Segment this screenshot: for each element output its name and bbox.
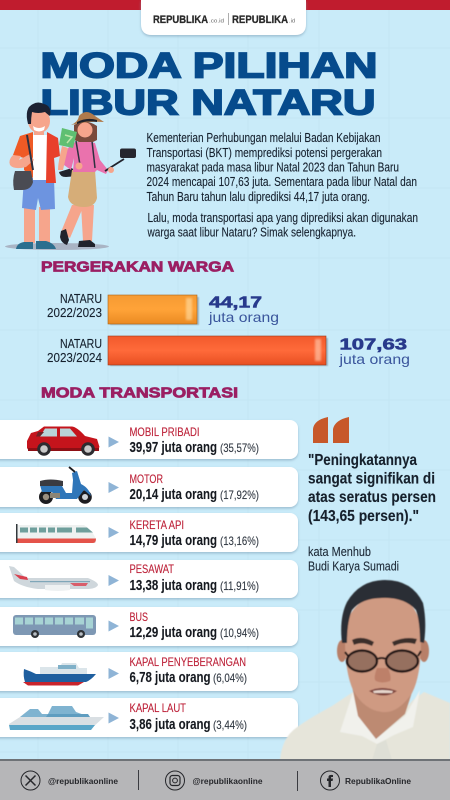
arrow: [108, 527, 119, 538]
value: 6,78 juta orang: [130, 670, 210, 686]
bar: 2023/2024: [108, 336, 328, 366]
arrow: [108, 620, 119, 632]
logo tab: .co.id: [209, 18, 224, 24]
hair: [341, 580, 425, 643]
title: [40, 46, 378, 122]
share: (6,04%): [213, 671, 247, 685]
bar chart: pergerakan warga: [47, 292, 410, 367]
value: 39,97 juta orang: [130, 440, 217, 456]
arrow: [108, 436, 119, 448]
value: 20,14 juta orang: [130, 487, 217, 503]
illustration: tourists: [5, 102, 136, 250]
arrow: [108, 482, 119, 493]
label: nataru 2023/2024: NATARU: [60, 337, 102, 351]
label: KERETA API: [130, 518, 184, 532]
value: 107,63: [338, 336, 410, 367]
handle: x: @republikaonline: [48, 777, 119, 786]
intro text: masyarakat pada masa libur Natal 2023 dan Tahun Baru: [146, 160, 399, 174]
arrow: [108, 575, 119, 586]
label: nataru 2022/2023: NATARU: [60, 292, 102, 306]
card: bus: [0, 607, 298, 646]
quote attribution: [308, 545, 399, 574]
intro text: Kementerian Perhubungan melalui Badan Kebijakan: [146, 131, 381, 145]
share: (17,92%): [220, 488, 259, 502]
value: 13,38 juta orang: [130, 578, 217, 594]
value: 107,63: juta orang: [338, 351, 410, 367]
title: MODA PILIHAN: [40, 46, 378, 86]
man legs and shoes: [24, 207, 35, 243]
icon: car: [27, 426, 100, 456]
icon: bus: [13, 615, 96, 638]
quote attribution: Budi Karya Sumadi: [308, 560, 399, 574]
arrow: [108, 712, 119, 724]
quote attribution: kata Menhub: [308, 545, 371, 559]
title: LIBUR NATARU: [40, 84, 376, 122]
neck: [352, 686, 414, 739]
label: MOTOR: [130, 472, 163, 486]
card: mobil pribadi: [0, 420, 298, 459]
label: nataru 2022/2023: 2022/2023: [47, 306, 102, 320]
value: 44,17: [208, 294, 279, 325]
eyebrows: [352, 638, 374, 646]
face: [345, 595, 421, 712]
card: motor: [0, 467, 298, 507]
shirt: [280, 692, 450, 760]
value: 14,79 juta orang: [130, 533, 217, 549]
icon: x: [21, 771, 40, 790]
woman: [61, 205, 84, 238]
logo tab: .id: [289, 18, 295, 24]
intro text: warga saat libur Nataru? Simak selengkapnya.: [147, 226, 356, 240]
label: KAPAL PENYEBERANGAN: [130, 655, 246, 669]
glasses: [347, 650, 418, 672]
label: BUS: [130, 610, 148, 624]
label: MOBIL PRIBADI: [130, 425, 200, 439]
icon: scooter: [39, 467, 92, 504]
icon: facebook: [320, 771, 340, 790]
bar: 2022/2023: [108, 295, 199, 325]
top red bar: [0, 0, 450, 10]
value: 44,17: 44,17: [209, 294, 262, 312]
icon: train: [16, 524, 96, 543]
quote text: atas seratus persen: [308, 489, 436, 506]
card: pesawat: [0, 560, 298, 598]
share: (13,16%): [220, 534, 259, 548]
quote text: [308, 452, 436, 525]
label: nataru 2022/2023: [47, 292, 102, 320]
value: 107,63: 107,63: [340, 336, 408, 354]
icon: cruise ship: [9, 706, 104, 730]
intro text: Transportasi (BKT) memprediksi potensi pergerakan: [146, 146, 382, 160]
value: 12,29 juta orang: [130, 625, 217, 641]
icon: ferry: [23, 663, 96, 686]
card: kereta api: [0, 513, 298, 552]
label: nataru 2023/2024: 2023/2024: [47, 351, 102, 365]
value: 44,17: juta orang: [208, 309, 279, 325]
arrow: [108, 668, 119, 679]
label: nataru 2023/2024: [47, 337, 102, 365]
quote text: (143,65 persen).": [308, 508, 419, 525]
intro text: Tahun Baru tahun lalu diprediksi 44,17 juta orang.: [146, 190, 370, 204]
value: 3,86 juta orang: [130, 717, 210, 733]
logo tab: [141, 0, 306, 35]
card: kapal penyeberangan: [0, 652, 298, 691]
handle: instagram: @republikaonline: [192, 777, 263, 786]
share: (10,94%): [220, 626, 259, 640]
footer bar: [0, 759, 450, 800]
icon: instagram: [166, 771, 184, 790]
photo: minister: [280, 580, 450, 760]
intro text: [146, 131, 418, 240]
map: [59, 128, 77, 148]
label: KAPAL LAUT: [130, 701, 187, 715]
handle: facebook: RepublikaOnline: [345, 777, 412, 786]
selfie stick: [105, 159, 124, 171]
ears: [337, 640, 347, 662]
label: PESAWAT: [130, 562, 175, 576]
logo tab: REPUBLIKA: [232, 14, 288, 26]
share: (11,91%): [220, 579, 259, 593]
share: (35,57%): [220, 441, 259, 455]
mouth: [369, 688, 397, 696]
logo tab: REPUBLIKA: [153, 14, 208, 26]
icon: quotation mark: [313, 417, 349, 443]
quote text: "Peningkatannya: [308, 452, 417, 469]
share: (3,44%): [213, 718, 247, 732]
nose: [375, 668, 391, 682]
heading: moda transportasi: MODA TRANSPORTASI: [41, 384, 238, 402]
icon: plane: [9, 566, 98, 591]
card: kapal laut: [0, 698, 298, 737]
heading: pergerakan warga: PERGERAKAN WARGA: [41, 258, 234, 276]
quote text: sangat signifikan di: [308, 470, 435, 488]
